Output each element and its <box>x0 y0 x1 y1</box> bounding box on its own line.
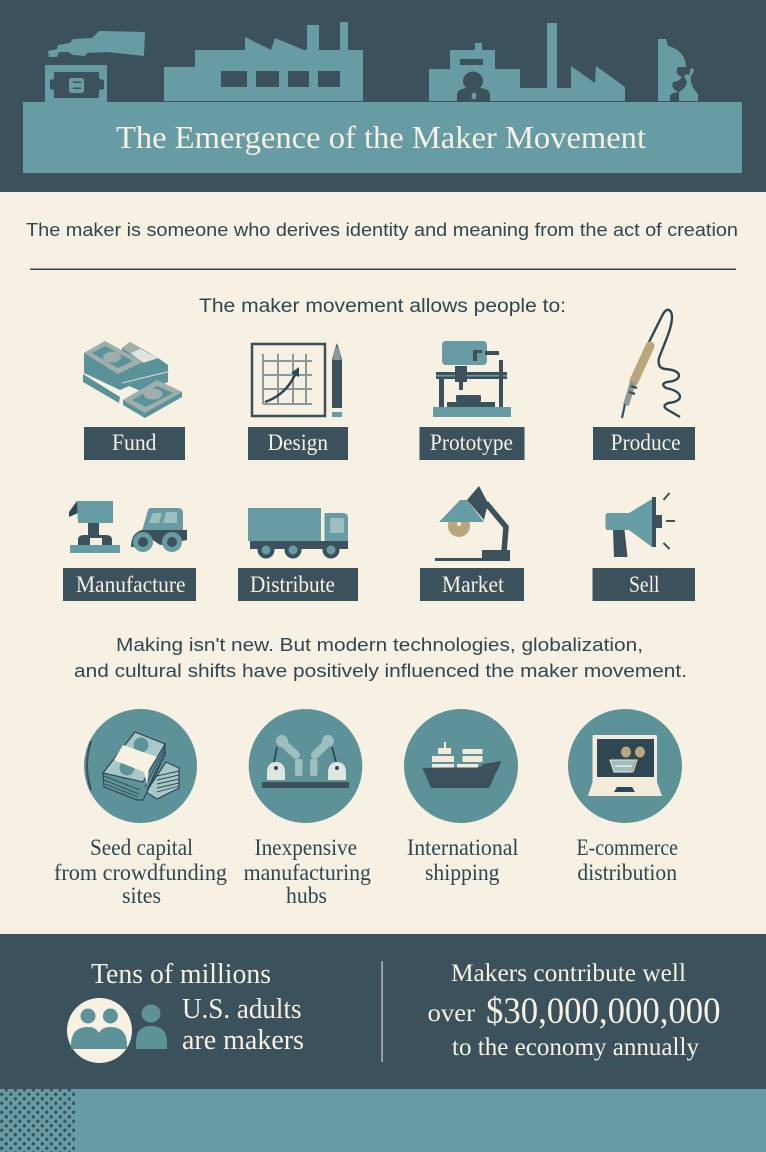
text: making isn't new: and cultural shifts have positively influenced the maker movement. <box>74 661 687 681</box>
icon: market lamp <box>435 486 510 561</box>
caption: seed capital: from crowdfunding <box>54 860 227 885</box>
stat: tens of millions of makers: Tens of millions <box>91 959 271 990</box>
caption: inexpensive manufacturing hubs: Inexpensive <box>254 835 357 860</box>
panel: statistics footer <box>0 934 766 1089</box>
stat: tens of millions of makers: are makers <box>182 1024 304 1056</box>
icon: people <box>67 998 167 1063</box>
stat: tens of millions of makers <box>67 959 304 1063</box>
label: Fund <box>84 427 185 460</box>
title banner <box>23 102 742 173</box>
icon: prototype 3D printer <box>433 341 511 417</box>
panel: actions grid <box>63 310 695 601</box>
intro statement: The maker is someone who derives identity and meaning from the act of creation <box>26 220 738 240</box>
stat: economic contribution: $30,000,000,000 <box>486 991 720 1032</box>
icon circle: laptop e-commerce <box>568 709 682 823</box>
label: Design: Design <box>268 430 328 455</box>
caption: e-commerce distribution <box>576 835 678 885</box>
icon: design chart and pencil <box>252 343 342 417</box>
label: Sell: Sell <box>629 572 660 597</box>
label: Design <box>248 427 348 460</box>
caption: international shipping <box>407 835 518 885</box>
footer band with dot pattern <box>0 1089 766 1152</box>
icon: figure silhouette <box>658 39 698 101</box>
caption: inexpensive manufacturing hubs: hubs <box>286 883 327 908</box>
stat: economic contribution: to the economy annually <box>452 1034 699 1061</box>
caption: international shipping: shipping <box>425 860 500 885</box>
label: Produce <box>593 427 695 460</box>
caption: e-commerce distribution: distribution <box>577 860 677 885</box>
caption: seed capital <box>54 835 227 908</box>
caption: seed capital: Seed capital <box>90 835 193 860</box>
label: Produce: Produce <box>611 430 681 455</box>
label: Distribute: Distribute <box>250 572 335 597</box>
caption: inexpensive manufacturing hubs <box>244 835 371 908</box>
title banner: The Emergence of the Maker Movement <box>116 119 646 155</box>
icon: produce soldering iron <box>622 310 680 418</box>
stat: economic contribution: over <box>428 1000 476 1027</box>
label: Prototype: Prototype <box>430 430 513 455</box>
label: Distribute <box>238 568 358 601</box>
label: Manufacture <box>63 568 196 601</box>
stat: economic contribution: Makers contribute well <box>451 960 686 987</box>
label: Market <box>420 568 524 601</box>
subheading: allows people to: The maker movement allows people to: <box>199 296 566 317</box>
text: making isn't new <box>74 635 687 681</box>
text: making isn't new: Making isn't new. But modern technologies, globalization, <box>116 635 643 655</box>
label: Manufacture: Manufacture <box>76 572 186 597</box>
icon: fund money stacks <box>83 341 182 418</box>
icon: factory silhouette <box>164 22 363 101</box>
icon: distribute truck <box>248 508 348 558</box>
icon: bottle over box <box>45 31 145 102</box>
label: Market: Market <box>442 572 505 597</box>
caption: international shipping: International <box>407 835 518 860</box>
icon: sell megaphone <box>606 493 675 557</box>
label: Prototype <box>420 427 524 460</box>
icon circle: cargo ship <box>404 709 518 823</box>
caption: e-commerce distribution: E-commerce <box>576 835 678 860</box>
icon circle: robot arms <box>249 709 362 823</box>
panel: header <box>0 0 766 192</box>
icon: manufacture machine and vehicle <box>69 501 187 553</box>
stat: tens of millions of makers: U.S. adults <box>182 993 302 1025</box>
icon: workshop silhouette <box>429 23 625 101</box>
label: Fund: Fund <box>112 430 157 455</box>
caption: inexpensive manufacturing hubs: manufacturing <box>244 860 371 885</box>
panel: influences <box>54 709 682 908</box>
label: Sell <box>592 568 695 601</box>
icon circle: seed capital money <box>84 709 197 823</box>
caption: seed capital: sites <box>122 883 161 908</box>
stat: economic contribution <box>428 960 720 1061</box>
